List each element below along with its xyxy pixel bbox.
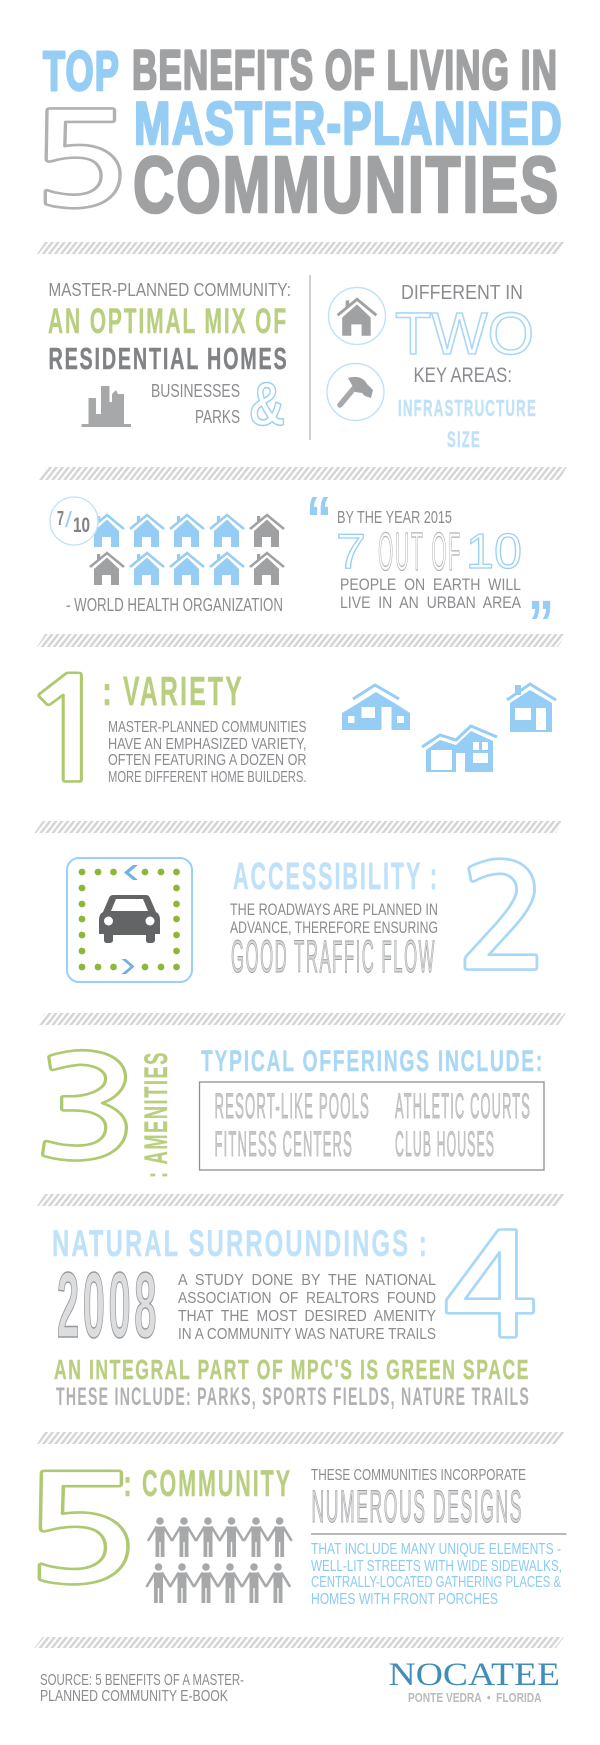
body text: ASSOCIATION OF REALTORS FOUND xyxy=(178,1290,436,1307)
body text: IN A COMMUNITY WAS NATURE TRAILS xyxy=(178,1326,436,1343)
definition label: MASTER-PLANNED COMMUNITY: xyxy=(48,279,291,300)
statistic: 7: 7 xyxy=(336,525,366,579)
body text: A STUDY DONE BY THE NATIONAL xyxy=(178,1272,436,1289)
quote line 1: PEOPLE ON EARTH WILL xyxy=(340,575,521,594)
icon: house in circle xyxy=(328,288,386,344)
icon: house B xyxy=(422,726,497,772)
badge: 7/10 xyxy=(50,497,98,545)
heading: community: COMMUNITY xyxy=(142,1463,292,1504)
colon: : xyxy=(102,668,112,714)
panel: 3 amenities xyxy=(32,1041,544,1181)
body text: THAT THE MOST DESIRED AMENITY xyxy=(178,1308,436,1325)
badge: 7/10: 10 xyxy=(73,514,90,537)
heading: residential homes: RESIDENTIAL HOMES xyxy=(48,341,288,376)
title word: top: TOP xyxy=(43,39,120,102)
heading: accessibility: ACCESSIBILITY : xyxy=(233,856,439,898)
badge: 7/10: / xyxy=(65,507,73,532)
panel: different in two key areas xyxy=(327,281,537,452)
body text: HAVE AN EMPHASIZED VARIETY, xyxy=(108,736,306,753)
body text xyxy=(108,719,306,786)
numeral 5: 5 xyxy=(20,1460,141,1606)
footer: source xyxy=(40,1672,244,1705)
label: parks: PARKS xyxy=(195,406,240,427)
offerings box: FITNESS CENTERS xyxy=(214,1125,353,1164)
body text: MASTER-PLANNED COMMUNITIES xyxy=(108,719,306,736)
attribution: - WORLD HEALTH ORGANIZATION xyxy=(66,595,283,615)
rotated heading: amenities: : AMENITIES xyxy=(138,1051,174,1178)
colon: : xyxy=(123,1463,132,1504)
icon: hammer in circle xyxy=(327,364,384,420)
statistic: 10: 10 xyxy=(466,525,522,579)
body text: MORE DIFFERENT HOME BUILDERS. xyxy=(108,769,306,786)
panel: 4 natural surroundings: 2008 xyxy=(57,1253,160,1357)
title xyxy=(29,38,563,229)
numeral 1: 1 xyxy=(17,662,120,803)
outlined word: two: TWO xyxy=(395,301,534,367)
icon: people row 2 xyxy=(147,1563,290,1603)
badge: 7/10: 7 xyxy=(57,508,64,530)
body text: THE ROADWAYS ARE PLANNED IN xyxy=(230,901,438,919)
outlined numeral 5: 5 xyxy=(29,99,131,227)
ampersand: & xyxy=(249,370,285,438)
close quote mark: ” xyxy=(528,587,554,659)
open quote mark: “ xyxy=(306,483,332,555)
icon: house C xyxy=(507,684,556,732)
house grid xyxy=(90,515,284,585)
body text xyxy=(230,901,438,937)
label: businesses: BUSINESSES xyxy=(151,380,240,401)
body text xyxy=(178,1272,436,1343)
icon: people row 1 xyxy=(148,1517,291,1557)
lead-in: BY THE YEAR 2015 xyxy=(337,507,452,527)
lead-in: THESE COMMUNITIES INCORPORATE xyxy=(311,1467,526,1484)
logo: nocatee xyxy=(388,1657,560,1705)
label: key areas: KEY AREAS: xyxy=(414,364,512,387)
panel: 5 community xyxy=(20,1460,566,1608)
quote line 2: LIVE IN AN URBAN AREA xyxy=(340,593,522,612)
logo: nocatee: PONTE VEDRA • FLORIDA xyxy=(408,1691,542,1705)
icon: car on a dotted road xyxy=(67,858,192,982)
numeral 3: 3 xyxy=(32,1041,141,1181)
label: different in: DIFFERENT IN xyxy=(401,281,523,304)
offerings box xyxy=(200,1082,544,1170)
body text: OFTEN FEATURING A DOZEN OR xyxy=(108,752,306,769)
blue body text xyxy=(311,1541,562,1608)
icon: city skyline xyxy=(82,386,131,427)
panel: 7 of 10 houses xyxy=(50,497,284,615)
blue body text: HOMES WITH FRONT PORCHES xyxy=(311,1591,498,1608)
icon: house A xyxy=(342,685,410,730)
label: size: SIZE xyxy=(447,427,481,452)
panel: quote xyxy=(306,483,554,659)
heading: variety: VARIETY xyxy=(123,668,244,714)
heading: optimal mix: AN OPTIMAL MIX OF xyxy=(48,302,288,341)
footer: source: PLANNED COMMUNITY E-BOOK xyxy=(40,1688,228,1705)
numeral 2: 2 xyxy=(456,849,551,991)
panel: optimal mix xyxy=(48,279,291,438)
footer: source: SOURCE: 5 BENEFITS OF A MASTER- xyxy=(40,1672,244,1689)
panel: 2 accessibility xyxy=(67,849,551,991)
panel: 1 variety xyxy=(17,662,556,803)
logo: nocatee: NOCATEE xyxy=(388,1657,560,1693)
numeral 4: 4 xyxy=(442,1219,538,1359)
body text: ADVANCE, THEREFORE ENSURING xyxy=(230,919,438,937)
panel: 4 natural surroundings xyxy=(52,1219,538,1411)
